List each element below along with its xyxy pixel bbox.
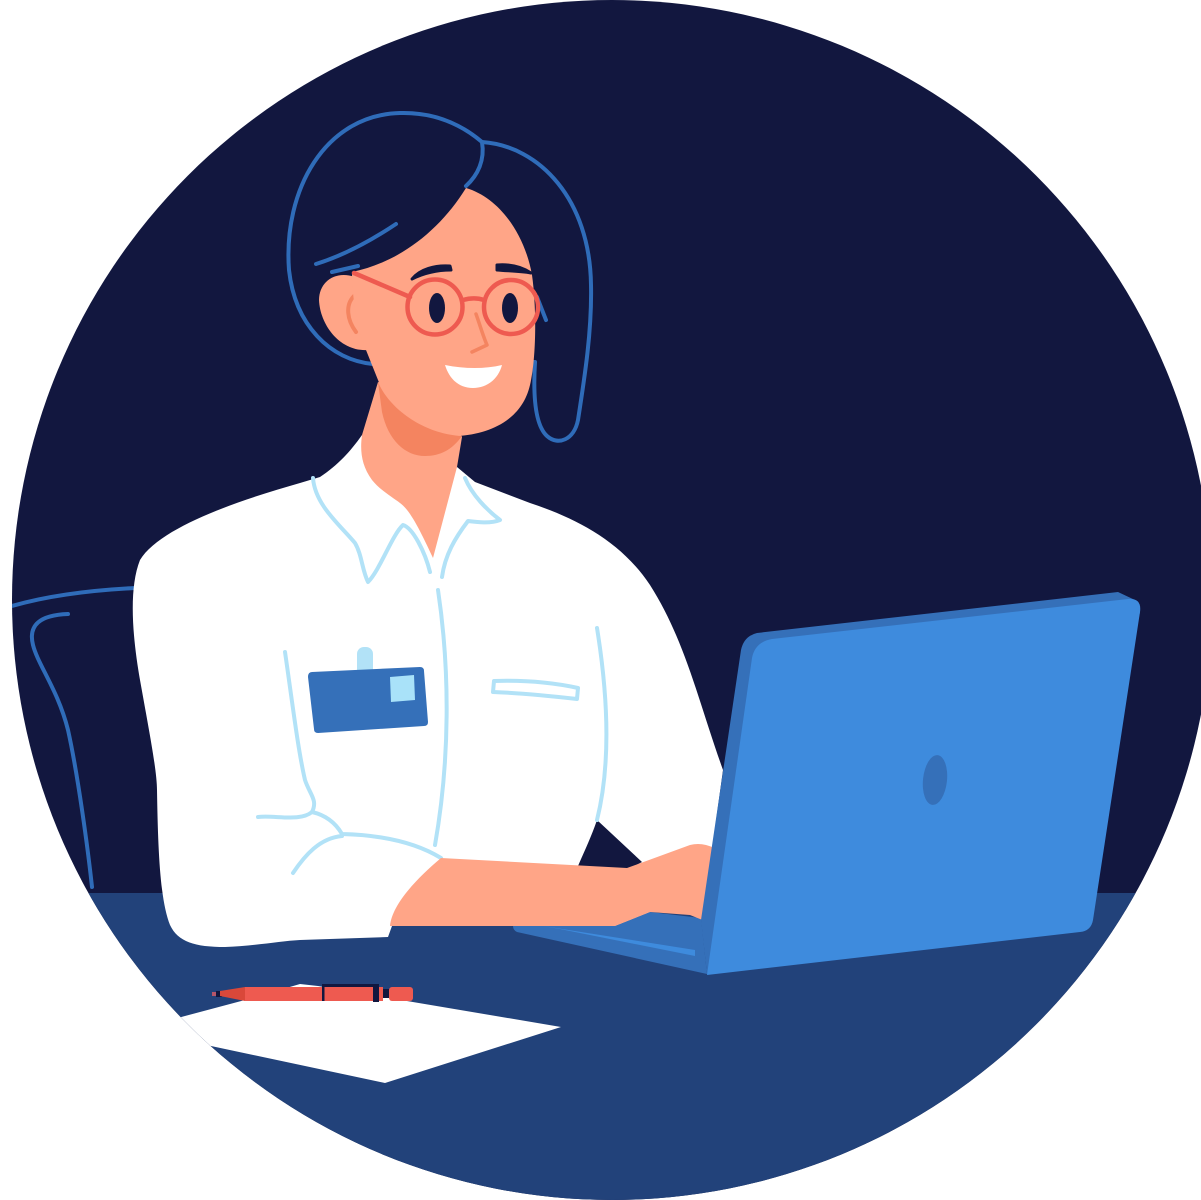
- glasses: [354, 273, 538, 334]
- laptop base: [513, 912, 707, 974]
- dark gap between arm and torso: [578, 820, 642, 870]
- shirt body: [133, 435, 723, 947]
- ear: [319, 275, 368, 350]
- smile: [445, 365, 502, 388]
- badge photo: [390, 675, 415, 702]
- neck: [361, 382, 462, 558]
- name badge: [308, 667, 428, 733]
- eyes: [429, 293, 518, 323]
- face: [352, 188, 535, 436]
- paper on desk: [170, 984, 561, 1083]
- laptop keyboard line: [543, 926, 695, 956]
- hair strand: [316, 224, 396, 264]
- nose: [472, 314, 487, 352]
- eyebrows: [412, 266, 451, 279]
- chair outline: [12, 588, 135, 887]
- ear detail: [348, 296, 356, 332]
- hair front strand: [466, 142, 483, 186]
- pen: [212, 984, 413, 1002]
- hair back: [288, 113, 591, 441]
- forearm: [390, 844, 714, 926]
- laptop logo: [922, 755, 948, 805]
- laptop lid back edge: [701, 592, 1140, 974]
- laptop lid: [707, 599, 1140, 975]
- chin shadow on neck: [378, 382, 462, 456]
- desk: [88, 893, 1136, 1200]
- fringe ticks: [332, 266, 546, 320]
- badge clip: [357, 647, 373, 670]
- shirt seams and collar: [258, 478, 606, 873]
